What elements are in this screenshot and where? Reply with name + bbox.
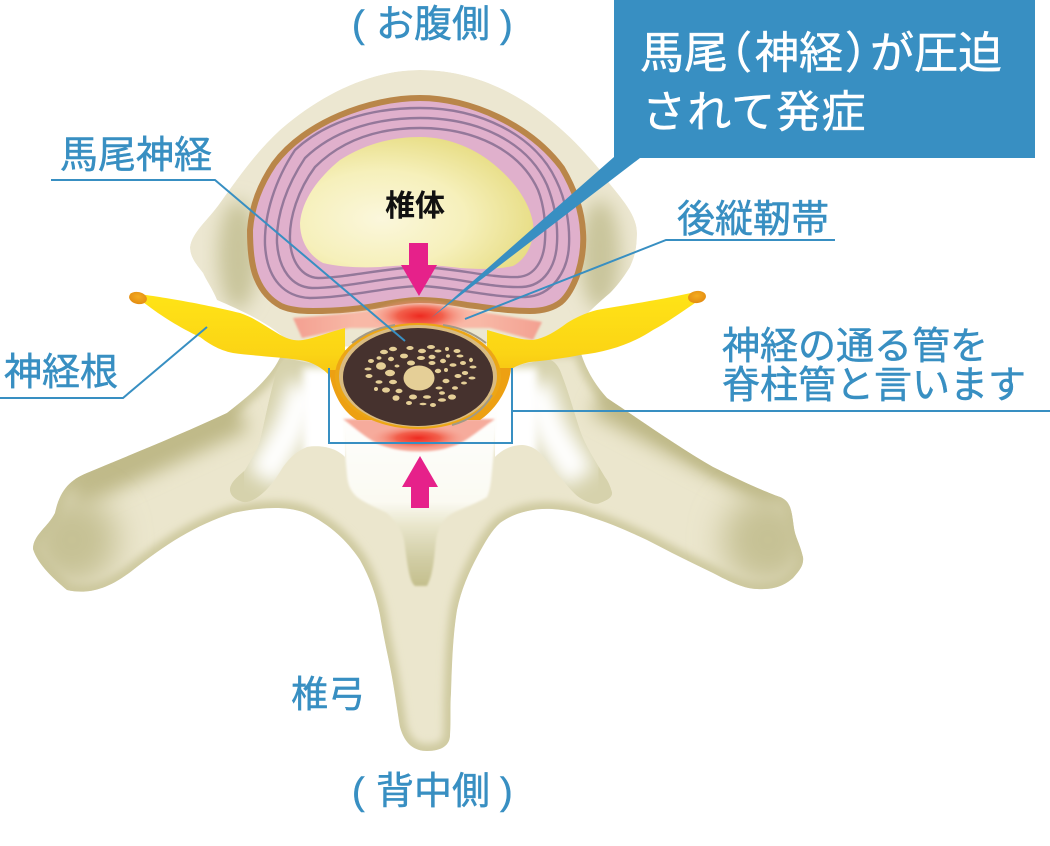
label: posterior longitudinal ligament bbox=[465, 199, 835, 319]
callout bracket: spinal canal bbox=[329, 368, 1050, 443]
label: cauda equina bbox=[51, 135, 405, 341]
canal orange wings bbox=[329, 368, 511, 420]
nerve fibers bbox=[364, 345, 476, 407]
vertebra bone illustration bbox=[26, 70, 814, 751]
label: cauda equina: 馬尾神経 bbox=[60, 135, 212, 177]
label: abdomen side: お腹側 bbox=[376, 4, 490, 46]
label: abdomen side: ( bbox=[352, 4, 365, 46]
label: back side: ) bbox=[500, 771, 513, 813]
callout text: 神経 bbox=[755, 29, 843, 78]
vertebral arch and processes bbox=[26, 350, 814, 751]
label: back side: 背中側 bbox=[376, 771, 490, 813]
disc outer ring bbox=[250, 98, 583, 311]
callout text: 馬尾 bbox=[640, 29, 728, 78]
nerve root tip right bbox=[687, 290, 707, 304]
ligament pink band top bbox=[293, 299, 542, 340]
label: spinal canal explanation: 脊柱管と言います bbox=[722, 365, 1026, 407]
label: abdomen side: ) bbox=[500, 4, 513, 46]
arrow: bottom compression bbox=[402, 456, 438, 508]
label: spinal canal explanation: 神経の通る管を bbox=[722, 326, 988, 368]
label: nerve root: 神経根 bbox=[4, 352, 118, 394]
ligament band bottom bbox=[343, 419, 495, 452]
label: vertebral body: 椎体 bbox=[385, 190, 445, 223]
intervertebral disc bbox=[250, 98, 583, 311]
cauda equina dark sac bbox=[343, 328, 493, 426]
nerve root left bbox=[130, 293, 345, 395]
nerve root right bbox=[487, 292, 695, 395]
nucleus core bbox=[300, 137, 533, 269]
right articular facet bbox=[487, 359, 612, 504]
label: vertebral arch: 椎弓 bbox=[291, 674, 365, 715]
callout text: が圧迫 bbox=[870, 29, 1002, 78]
spinal canal bbox=[329, 323, 511, 429]
arrow: top compression bbox=[401, 243, 437, 296]
callout text: （ bbox=[708, 29, 752, 78]
vertebral body outer bone bbox=[190, 70, 637, 347]
label: nerve root bbox=[0, 327, 207, 398]
left articular facet bbox=[230, 359, 353, 502]
nerve root tip left bbox=[128, 290, 148, 306]
central lamina white groove bbox=[340, 395, 500, 586]
callout text: されて発症 bbox=[642, 88, 867, 137]
disc laminae lines bbox=[265, 108, 569, 298]
callout box bbox=[431, 0, 1035, 318]
label: back side: ( bbox=[352, 771, 365, 813]
callout text: ） bbox=[845, 29, 889, 78]
label: posterior longitudinal ligament: 後縦靭帯 bbox=[677, 199, 829, 241]
